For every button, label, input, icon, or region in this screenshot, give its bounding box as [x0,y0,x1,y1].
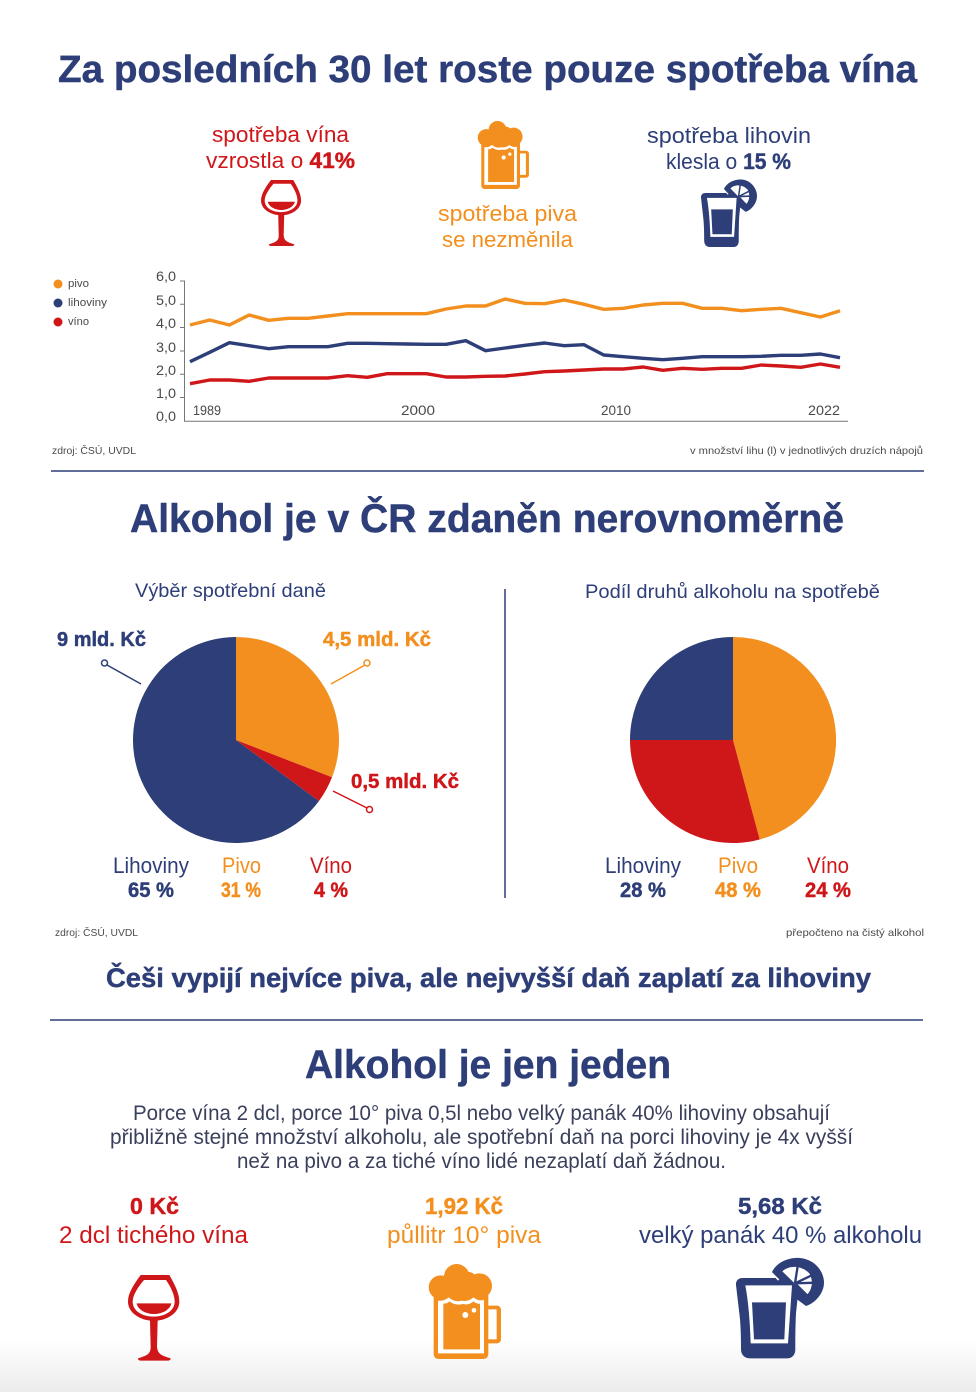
pie labels: tax: Pivo [222,853,261,878]
icon: beer mug large [429,1264,501,1359]
column: spirits tax: 5,68 Kč [738,1193,822,1219]
panel: consumption share [585,581,880,902]
legend: lihoviny [68,297,108,309]
callout: 0,5 mld [333,771,459,812]
line chart [156,268,848,424]
column: beer tax: půllitr 10° piva [387,1222,542,1249]
title: Za posledních 30 let roste pouze spotřeba vína [58,49,918,91]
column: spirits tax: velký panák 40 % alkoholu [639,1222,922,1249]
text block: než na pivo a za tiché víno lidé nezaplatí daň žádnou. [237,1150,726,1173]
pie chart: consumption [630,637,836,843]
column: wine tax [59,1193,249,1249]
source note: zdroj: ČSÚ, UVDL [52,444,136,457]
callout: beer [438,201,578,252]
y axis labels [156,268,176,424]
column: spirits tax [639,1193,922,1249]
y axis labels: 2,0 [156,362,176,378]
panel: tax revenue [57,580,459,902]
column: beer tax: 1,92 Kč [425,1193,503,1219]
x axis labels [193,402,840,418]
pie labels: tax: 4 % [314,879,348,902]
unit note: v množství lihu (l) v jednotlivých druzích nápojů [690,445,923,457]
text block [110,1102,853,1173]
callout: spirits: klesla o 15 % [666,149,791,174]
pie labels: consumption: 24 % [805,879,851,902]
pie labels: consumption: Víno [807,853,849,878]
pie labels: consumption: 48 % [715,879,761,902]
icon: wine glass large [128,1275,179,1361]
y axis labels: 5,0 [156,292,176,308]
y axis labels: 1,0 [156,385,176,401]
y axis labels: 3,0 [156,339,176,355]
y axis labels: 0,0 [156,408,176,424]
pie chart: tax [133,637,339,843]
callout: spirits: spotřeba lihovin [647,123,811,148]
text block: přibližně stejné množství alkoholu, ale spotřební daň na porci lihoviny je 4x vyšší [110,1126,853,1149]
series: beer [190,299,840,325]
legend: pivo [68,278,89,290]
pie labels: consumption: 28 % [620,879,666,902]
callout: 9 mld: 9 mld. Kč [57,629,146,651]
column: wine tax: 2 dcl tichého vína [59,1222,249,1249]
x axis labels: 2010 [601,402,631,418]
callout: 4,5 mld: 4,5 mld. Kč [323,629,431,651]
pie labels: tax: 31 % [221,879,261,902]
source note: zdroj: ČSÚ, UVDL [55,926,138,939]
callout: spirits [647,123,811,174]
icon: spirits glass [701,179,757,247]
series: wine [190,364,840,384]
pie heading: Podíl druhů alkoholu na spotřebě [585,581,880,603]
heading: one alcohol: Alkohol je jen jeden [305,1043,671,1087]
icon: wine glass [261,180,301,246]
pie labels: consumption [605,853,851,902]
text block: Porce vína 2 dcl, porce 10° piva 0,5l nebo velký panák 40% lihoviny obsahují [133,1102,830,1125]
series: spirits [190,341,840,362]
callout: beer: se nezměnila [442,227,574,252]
x axis labels: 2022 [808,402,840,418]
callout: 4,5 mld [323,629,431,684]
callout: wine: vzrostla o 41% [206,148,355,173]
column: wine tax: 0 Kč [130,1193,179,1219]
y axis labels: 4,0 [156,315,176,331]
conversion note: přepočteno na čistý alkohol [786,927,924,939]
pie heading: Výběr spotřební daně [135,580,326,602]
pie labels: tax: Lihoviny [113,853,189,878]
pie labels: tax: Víno [310,853,352,878]
callout: wine [206,122,355,173]
legend: víno [68,316,89,328]
bottom fade [0,1340,976,1392]
callout: beer: spotřeba piva [438,201,578,226]
pie labels: tax [113,853,352,902]
callout: 9 mld [57,629,146,684]
legend [54,278,108,328]
x axis labels: 2000 [401,402,435,418]
x axis labels: 1989 [193,402,221,418]
icon: spirits glass large [736,1258,824,1358]
pie labels: consumption: Lihoviny [605,853,681,878]
pie labels: tax: 65 % [128,879,174,902]
conclusion: Češi vypijí nejvíce piva, ale nejvyšší daň zaplatí za lihoviny [106,962,871,993]
heading: taxation: Alkohol je v ČR zdaněn nerovnoměrně [130,495,844,541]
callout: 0,5 mld: 0,5 mld. Kč [351,771,459,793]
y axis labels: 6,0 [156,268,176,284]
pie labels: consumption: Pivo [718,853,758,878]
icon: beer mug [478,121,529,189]
callout: wine: spotřeba vína [212,122,350,147]
column: beer tax [387,1193,542,1249]
